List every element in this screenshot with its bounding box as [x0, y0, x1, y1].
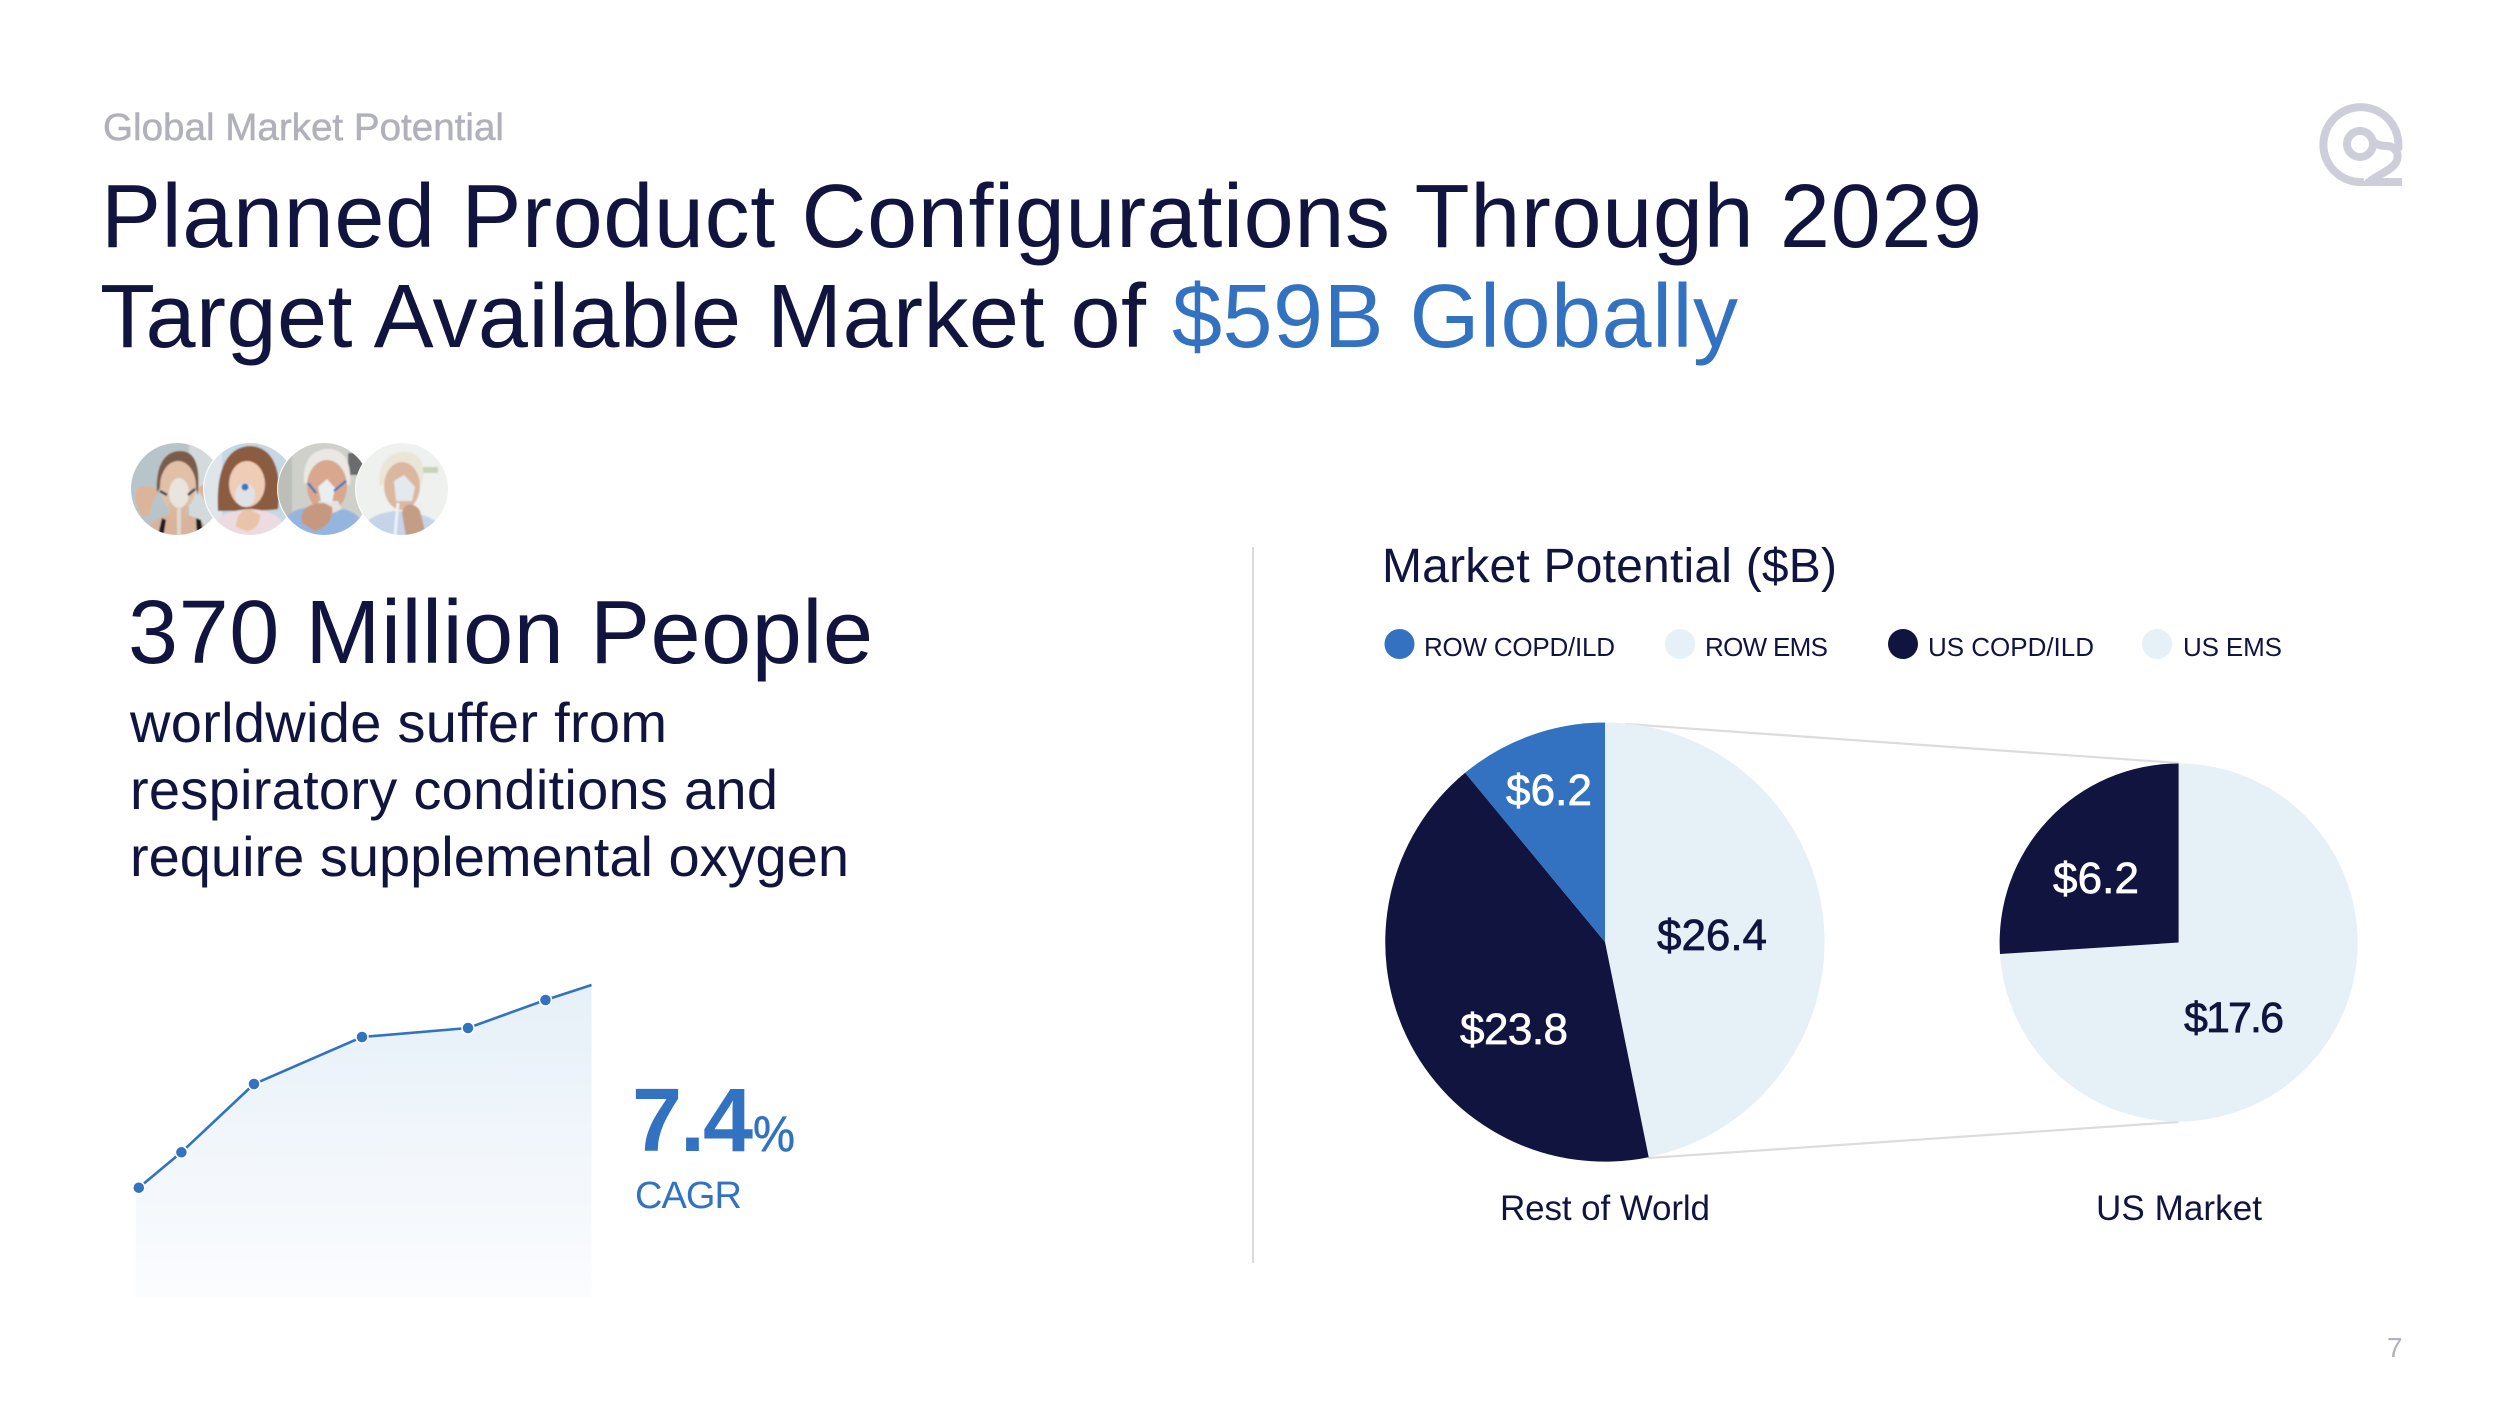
- CAGR callout: 7: [632, 1071, 682, 1171]
- photo: elderly man with oxygen mask: [277, 443, 362, 535]
- legend: [1384, 629, 2282, 662]
- pie label: US Market: US Market: [2096, 1189, 2262, 1228]
- photo: young woman with oxygen mask: [131, 443, 213, 535]
- big stat heading: 370 Million People: [128, 583, 873, 683]
- legend: US COPD/ILD: [1928, 632, 2094, 662]
- CAGR callout: .: [680, 1071, 705, 1171]
- pie chart: US Market: $17.6: [2184, 994, 2284, 1042]
- CAGR callout: [632, 1071, 795, 1217]
- chart heading: Market Potential ($B): [1382, 540, 1837, 593]
- patient photo circles: [131, 443, 448, 535]
- pie chart: Rest of World: [1385, 722, 1824, 1162]
- legend: ROW COPD/ILD: [1424, 632, 1615, 662]
- title: [100, 167, 1982, 367]
- pie label: Rest of World: Rest of World: [1500, 1189, 1710, 1228]
- title: Target Available Market of: [100, 267, 1147, 367]
- eyebrow heading: Global Market Potential: [103, 107, 504, 149]
- photo: elderly woman with oxygen mask: [355, 443, 448, 535]
- pie chart: US Market: $6.2: [2053, 854, 2139, 903]
- pie chart: US Market: [2000, 764, 2358, 1122]
- title: Planned Product Configurations Through 2029: [101, 167, 1982, 267]
- legend: ROW EMS: [1705, 632, 1828, 662]
- stat description: worldwide suffer from: [129, 691, 667, 754]
- page number: 7: [2387, 1332, 2403, 1363]
- legend: US EMS: [2183, 632, 2282, 662]
- CAGR callout: CAGR: [635, 1175, 742, 1217]
- pie chart: Rest of World: $26.4: [1657, 911, 1767, 960]
- CAGR callout: %: [753, 1106, 795, 1162]
- logo: [2323, 107, 2402, 182]
- CAGR callout: 4: [703, 1071, 753, 1171]
- stat description: respiratory conditions and: [130, 758, 778, 821]
- pie chart: Rest of World: $6.2: [1506, 766, 1592, 815]
- photo: girl with oxygen mask: [203, 443, 286, 535]
- title: $59B Globally: [1172, 267, 1738, 367]
- stat description: [129, 691, 849, 888]
- area line chart: [133, 985, 592, 1297]
- pie chart: Rest of World: $23.8: [1460, 1005, 1568, 1054]
- connector lines between pies: [1625, 724, 2179, 1158]
- stat description: require supplemental oxygen: [130, 825, 849, 888]
